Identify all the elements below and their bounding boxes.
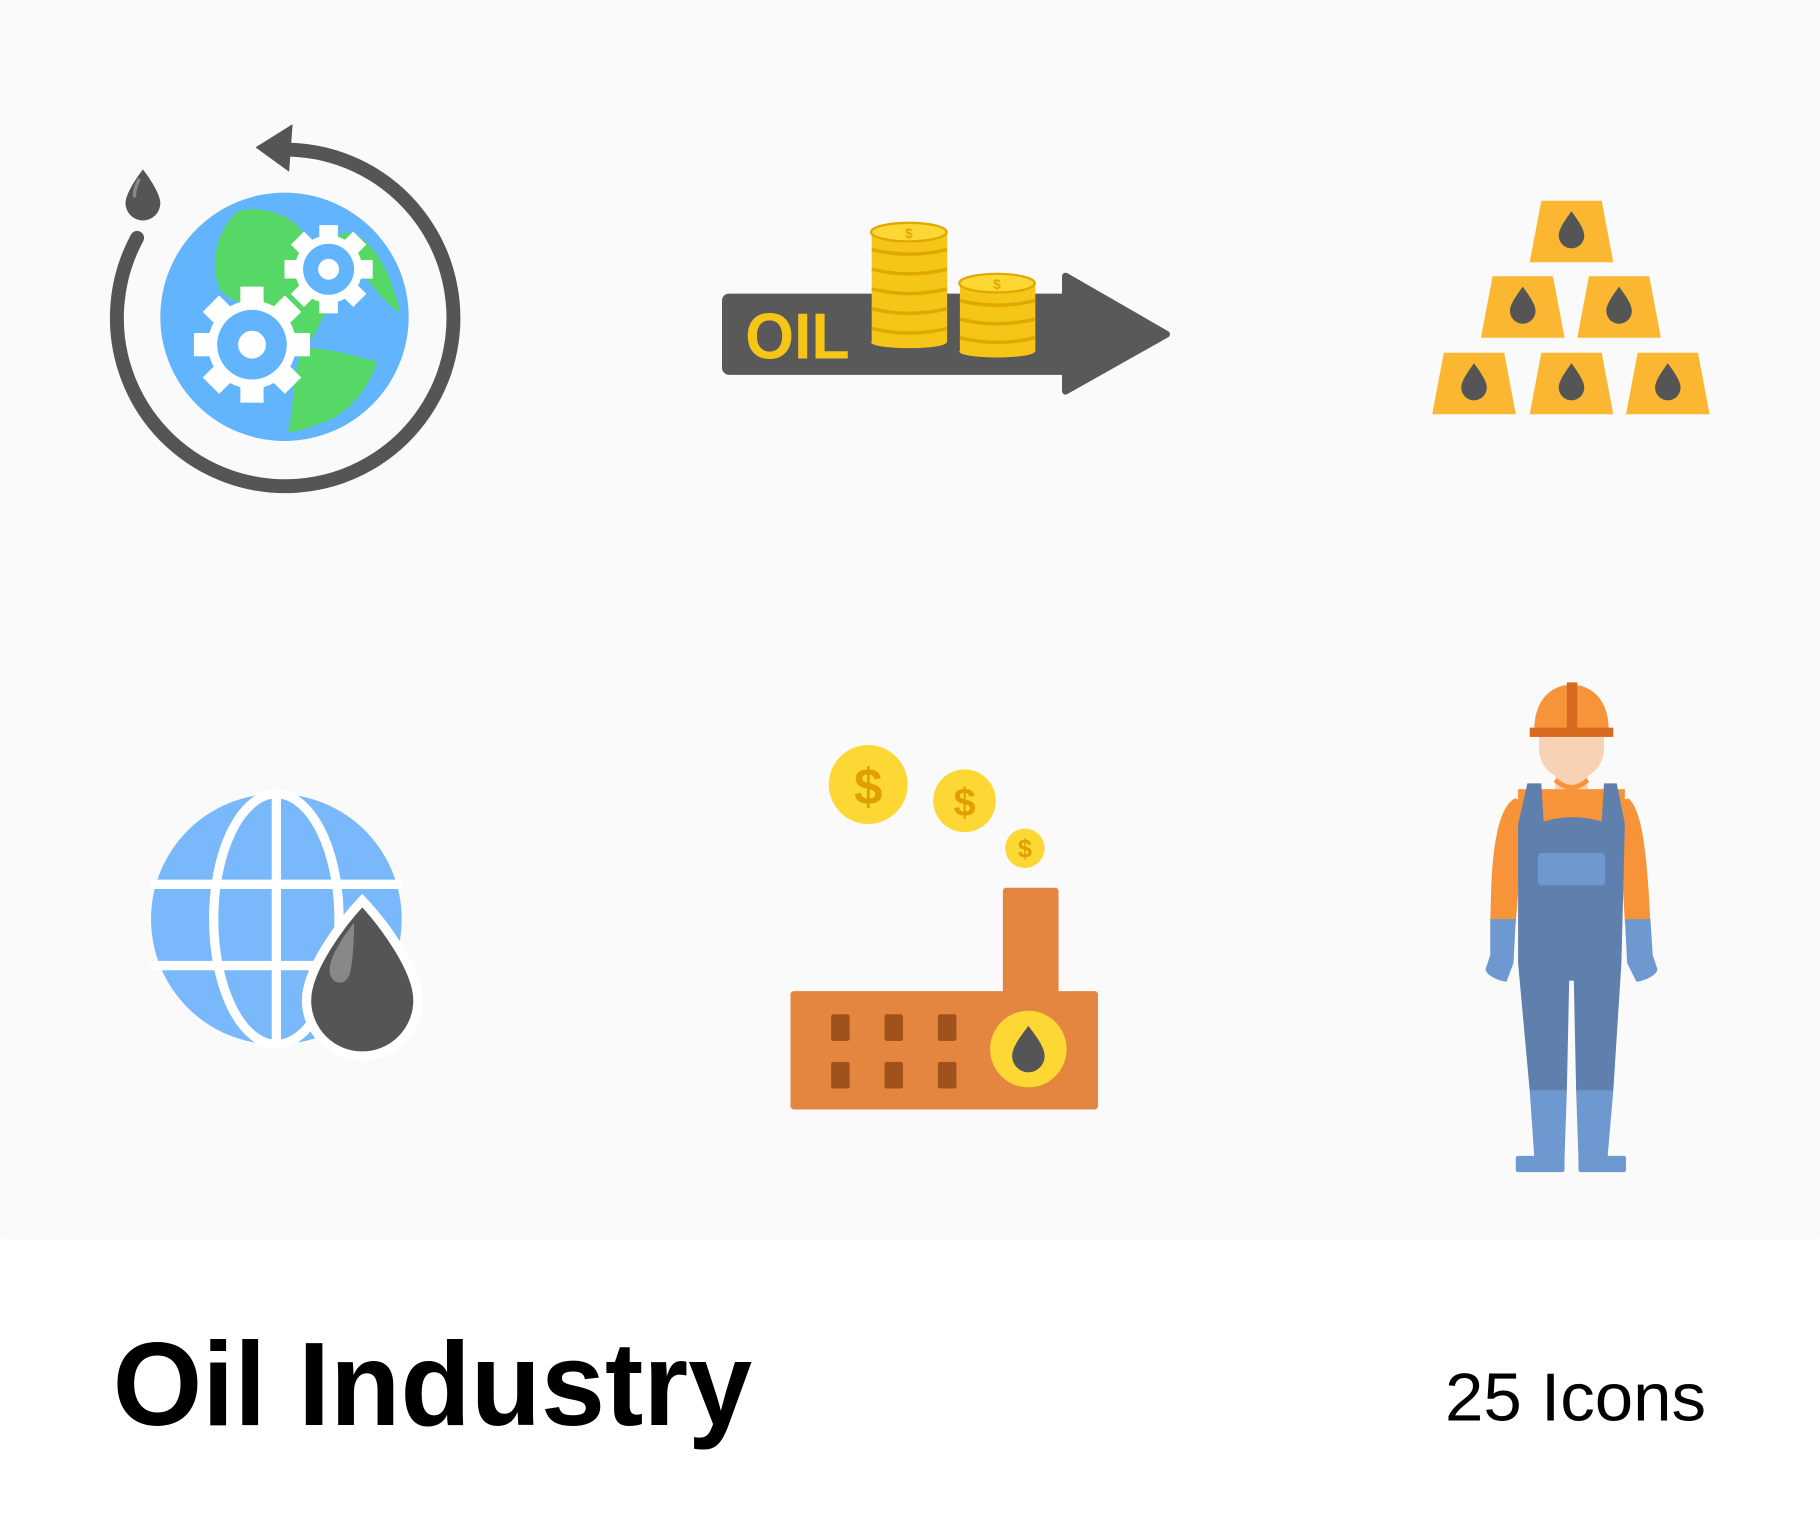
icon: oil factory with coins: $ <box>954 781 976 825</box>
icon: oil price arrow with coins: OIL <box>745 300 850 373</box>
icon: oil price arrow with coins: $ <box>993 276 1001 292</box>
icon: oil gold bars <box>1432 201 1710 414</box>
icon: oil factory with coins: $ <box>854 758 882 815</box>
icon: oil factory with coins <box>790 745 1098 1109</box>
icon: oil worker <box>1486 682 1657 1172</box>
icon: oil price arrow with coins: $ <box>905 225 913 241</box>
title: Oil Industry <box>113 1319 752 1451</box>
icon count label: 25 Icons <box>1445 1360 1706 1435</box>
icon: globe with gears and cycle arrow <box>117 124 453 486</box>
icon: globe with oil drop <box>151 794 418 1056</box>
icon: oil factory with coins: $ <box>1018 836 1032 864</box>
icon: oil price arrow with coins <box>722 223 1166 391</box>
